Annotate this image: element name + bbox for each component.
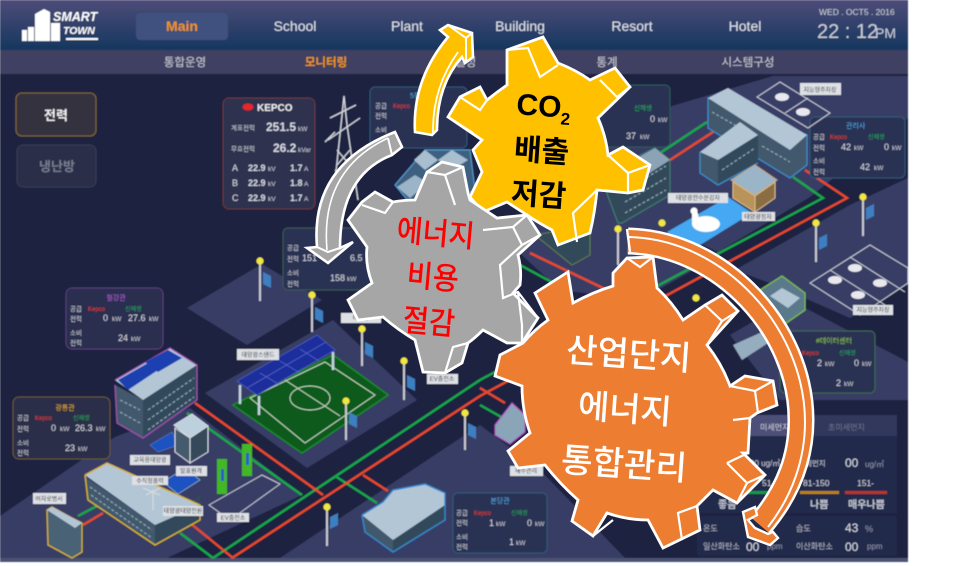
sub navigation: 모니터링 <box>305 56 347 69</box>
panel: management office: kW <box>892 145 902 152</box>
panel: optical hall: 광통관 <box>55 403 75 412</box>
panel: air quality: 세먼지 <box>805 458 826 468</box>
panel: temperature and gases: 일산화탄소 <box>703 541 740 551</box>
main navigation: Resort <box>611 18 653 34</box>
panel: top green <box>575 85 670 147</box>
date and clock: 22 : 12 <box>817 21 878 43</box>
building: behind gray gear <box>395 150 475 215</box>
panel: KEPCO: kV <box>268 196 276 203</box>
gear label: industrial complex energy management <box>557 332 696 488</box>
panel: KEPCO: 251.5 <box>266 120 296 134</box>
panel: optical hall: 전력 <box>17 424 29 433</box>
panel: management office: 전력 <box>813 167 825 176</box>
football field with solar canopy <box>233 335 388 453</box>
map labels <box>33 83 893 522</box>
panel: steel hall: 24 <box>118 333 128 343</box>
panel: data centre: 2 <box>836 378 841 388</box>
panel: management office: 관리사 <box>846 121 866 130</box>
sub navigation: 시스템구성 <box>722 56 774 69</box>
panel: optical hall: 소비 <box>17 438 29 447</box>
panel: temperature and gases: 이산화탄소 <box>796 541 833 551</box>
solar box and chargers <box>150 414 280 520</box>
panel: KEPCO: 26.2 <box>273 141 297 155</box>
gear label: energy cost saving <box>387 213 476 343</box>
map labels: 교육용태양광 <box>133 456 167 464</box>
panel: optical hall: kW <box>60 426 70 433</box>
panel: main hall: 공급 <box>456 509 468 517</box>
panel: KEPCO: C <box>232 193 239 203</box>
panel: data centre: kW <box>844 381 854 388</box>
gear label: CO2: 저감 <box>510 177 567 214</box>
panel: top green: kW <box>640 134 650 141</box>
button: heating and cooling <box>17 145 96 187</box>
parking lots <box>757 82 908 315</box>
panel: steel hall: 철강관 <box>106 293 126 302</box>
panel: KEPCO: 1.7 <box>290 163 303 173</box>
panel: management office: 공급 <box>813 133 825 141</box>
panel: centre building: 소비 <box>287 268 299 277</box>
main navigation: Hotel <box>729 18 761 34</box>
building: yellow small block <box>47 507 82 558</box>
panel: management office: kW <box>874 165 884 172</box>
panel: centre building: 전력 <box>287 254 299 263</box>
button: electricity: 전력 <box>44 108 68 123</box>
panel: air quality: 미세먼지 <box>760 422 789 432</box>
panel: KEPCO: kW <box>298 126 308 133</box>
panel: KEPCO: 22.9 <box>248 163 266 173</box>
gear label: energy cost saving: 비용 <box>405 258 460 297</box>
map labels: EV충전소 <box>430 375 455 383</box>
panel: steel hall: Kepco <box>88 307 106 313</box>
panel: temperature and gases: ppm <box>867 542 883 551</box>
panel: KEPCO: kV <box>268 166 276 173</box>
gear label: CO2 <box>509 88 573 214</box>
header bar <box>0 0 908 50</box>
panel: main hall: Kepco <box>474 511 492 517</box>
panel: KEPCO: 무효전력 <box>231 144 255 153</box>
panel: KEPCO: A <box>304 181 309 188</box>
logo <box>22 9 99 41</box>
logo: SMART <box>53 10 99 24</box>
arrow: yellow curved up <box>415 25 473 135</box>
panel: main hall: kW <box>496 521 506 528</box>
logo: TOWN <box>63 25 95 37</box>
map labels: 여자로병서 <box>35 495 63 503</box>
map labels: 태양광 <box>353 314 370 322</box>
panel: main hall: 신재생 <box>511 509 528 517</box>
arrow: gray curved down <box>307 132 402 263</box>
panel: steel hall: 소비 <box>70 328 82 337</box>
panel: KEPCO: 1.7 <box>290 193 303 203</box>
panel: top green: kW <box>658 117 668 124</box>
panel: main hall: 1 <box>509 537 514 547</box>
map labels: 해수관리 <box>515 467 537 475</box>
panel: KEPCO: A <box>304 196 309 203</box>
building: yellow main hall <box>85 463 200 545</box>
panel: management office: 소비 <box>813 156 825 165</box>
gear label: CO2: CO <box>515 88 563 124</box>
panel: optical hall: kW <box>78 446 88 453</box>
sub navigation <box>0 50 908 74</box>
panel: temperature and gases: % <box>865 524 873 534</box>
panel: optical hall: 23 <box>65 443 75 453</box>
panel: top plant: 전력 <box>375 111 387 120</box>
panel: temperature and gases: ppm <box>767 542 783 551</box>
panel: KEPCO: 22.9 <box>248 193 266 203</box>
panel: management office: 0 <box>884 142 889 152</box>
building: purple block <box>115 348 197 438</box>
arrow: orange clockwise arc <box>627 229 805 545</box>
panel: data centre: 0 <box>854 358 859 368</box>
panel: top plant: 공급 <box>375 102 387 110</box>
panel: temperature and gases: 00 <box>746 540 760 554</box>
panel: top green: 신재생 <box>634 103 652 112</box>
pond with duck and pavilion <box>667 165 777 250</box>
panel: optical hall: 전력 <box>17 448 29 457</box>
map labels: 지능형주차장 <box>803 86 837 94</box>
panel: air quality: 초미세먼지 <box>828 422 865 432</box>
panel: main hall: 1 <box>489 518 494 528</box>
gear label: industrial complex energy management: 에너지 <box>577 388 673 432</box>
panel: KEPCO <box>223 98 315 209</box>
gear label: energy cost saving: 에너지 <box>395 213 476 254</box>
panel: KEPCO: A <box>232 163 238 173</box>
panel: main hall: 0 <box>527 518 532 528</box>
street lamps <box>256 193 874 546</box>
panel: centre building <box>283 228 380 290</box>
panel: KEPCO: 1.8 <box>290 178 303 188</box>
panel: data centre: 신재생 <box>839 349 856 357</box>
panel: air quality: 81-150 <box>803 478 830 488</box>
panel: steel hall: kW <box>131 336 141 343</box>
map labels: 지능형주차장 <box>856 306 890 314</box>
panel: steel hall: kW <box>149 316 159 323</box>
panel: steel hall: 공급 <box>70 305 82 313</box>
panel: main hall: kW <box>535 521 545 528</box>
panel: steel hall: 0 <box>103 313 108 323</box>
panel: data centre: kW <box>862 361 872 368</box>
panel: centre building: 158 <box>330 273 345 283</box>
panel: steel hall: 신재생 <box>125 305 142 313</box>
panel: top plant: 5동 <box>410 92 421 100</box>
panel: KEPCO: A <box>304 166 309 173</box>
panel: steel hall: 전력 <box>70 338 82 347</box>
panel: management office <box>810 117 905 178</box>
panel: air quality: ug/㎥ <box>865 460 884 469</box>
panel: air quality: 00 ug/㎥ <box>750 459 780 468</box>
panel: optical hall: Kepco <box>35 416 53 422</box>
panel: KEPCO: 계표전력 <box>231 123 255 132</box>
map labels: 태양광스탠드 <box>241 351 275 359</box>
panel: optical hall: 신재생 <box>73 414 90 422</box>
panel: optical hall: kW <box>96 426 106 433</box>
sub navigation: 통합운영 <box>164 56 206 69</box>
panel: temperature and gases: 00 <box>845 540 859 554</box>
sub navigation: 통계 <box>596 56 618 69</box>
sub navigation: 환경설정 <box>434 55 476 69</box>
gear label: CO2: 2 <box>560 109 571 129</box>
map labels: 태양광정자 <box>744 213 772 221</box>
panel: optical hall <box>13 397 110 459</box>
panel: centre building: 공급 <box>287 244 299 252</box>
panel: steel hall: 전력 <box>70 314 82 323</box>
panel: main hall: kW <box>516 540 526 547</box>
pipelines <box>78 122 847 558</box>
building: T-shaped blue hall <box>700 88 807 185</box>
panel: temperature and gases: 온도 <box>703 524 718 533</box>
panel: optical hall: 26.3 <box>75 423 93 433</box>
date and clock <box>817 7 896 43</box>
panel: optical hall: 0 <box>51 423 56 433</box>
gear label: industrial complex energy management: 통합관리 <box>560 442 688 488</box>
gear label: CO2: 배출 <box>513 133 570 170</box>
panel: top green: 37 <box>626 131 636 141</box>
panel: data centre: #데이터센터 <box>816 336 852 345</box>
button: electricity <box>16 93 96 136</box>
map labels: 태양광전수분강자 <box>676 194 721 202</box>
panel: data centre: 2 <box>817 358 822 368</box>
panel: KEPCO: kV <box>268 181 276 188</box>
map labels: 발표원격 <box>180 467 202 475</box>
panel: data centre <box>780 331 875 393</box>
panel: KEPCO: B <box>232 178 238 188</box>
panel: data centre: kW <box>825 361 835 368</box>
gear label: industrial complex energy management: 산업단지 <box>565 332 692 378</box>
panel: temperature and gases: 습도 <box>796 524 811 533</box>
panel: main hall: 본당관 <box>490 496 510 505</box>
panel: management office: 신재생 <box>868 133 885 141</box>
panel: top plant: Kepco <box>393 104 411 110</box>
gear: yellow CO2 reduction <box>448 37 650 245</box>
main navigation: Plant <box>391 18 423 34</box>
panel: centre building: 전력 <box>287 279 299 288</box>
panel: air quality: 00 <box>845 456 859 470</box>
map labels: 태양광태양전원 <box>164 507 202 515</box>
building: pink and green blocks <box>495 276 805 444</box>
panel: management office: 42 <box>860 162 870 172</box>
main navigation <box>166 18 761 34</box>
panel: management office: 42 <box>841 142 851 152</box>
panel: KEPCO: KEPCO <box>257 103 293 114</box>
main navigation: School <box>274 18 316 34</box>
panel: data centre: Kepco <box>802 351 820 357</box>
panel: main hall <box>453 493 547 553</box>
gear: orange integrated management <box>495 257 777 548</box>
panel: air quality: 51-80 <box>762 478 784 488</box>
panel: optical hall: 공급 <box>17 414 29 422</box>
panel: air quality: 나쁨 <box>810 498 828 511</box>
map labels: EV충전소 <box>221 514 246 522</box>
panel: centre building: 6.5 <box>350 253 363 263</box>
gear label: energy cost saving: 절감 <box>401 303 456 342</box>
panel: air quality <box>693 415 897 513</box>
button: heating and cooling: 냉난방 <box>39 159 75 174</box>
panel: KEPCO: kVar <box>298 147 312 154</box>
main navigation: Building <box>495 18 545 34</box>
icon: transmission tower <box>325 96 360 200</box>
panel: management office: Kepco <box>830 135 848 141</box>
panel: steel hall <box>66 288 163 349</box>
main navigation: Main <box>166 18 198 34</box>
panel: management office: 전력 <box>813 143 825 152</box>
building: teal block <box>535 148 670 265</box>
panel: air quality: 매우나쁨 <box>848 498 885 511</box>
panel: centre building: 151 <box>302 253 317 263</box>
date and clock: PM <box>875 25 896 41</box>
panel: top plant <box>370 87 467 148</box>
date and clock: WED . OCT5 . 2016 <box>819 7 895 17</box>
panel: air quality: 좋음 <box>718 499 736 511</box>
building: blue cross hall <box>362 484 445 552</box>
panel: air quality: 151- <box>857 478 874 488</box>
map labels: 수직형풍력 <box>136 477 164 485</box>
panel: main hall: 전력 <box>456 542 468 551</box>
panel: temperature and gases <box>697 516 897 556</box>
panel: top plant: 소비 <box>375 125 387 134</box>
panel: management office: kW <box>854 145 864 152</box>
panel: main hall: 전력 <box>456 518 468 527</box>
panel: steel hall: kW <box>112 316 122 323</box>
panel: main hall: 소비 <box>456 532 468 541</box>
panel: centre building: kW <box>347 276 357 283</box>
active nav tab <box>136 13 228 40</box>
panel: steel hall: 27.6 <box>128 313 146 323</box>
panel: KEPCO: 22.9 <box>248 178 266 188</box>
gear: gray energy cost saving <box>348 162 540 373</box>
panel: temperature and gases: 43 <box>845 521 859 535</box>
panel: top green: 0 <box>650 114 655 124</box>
